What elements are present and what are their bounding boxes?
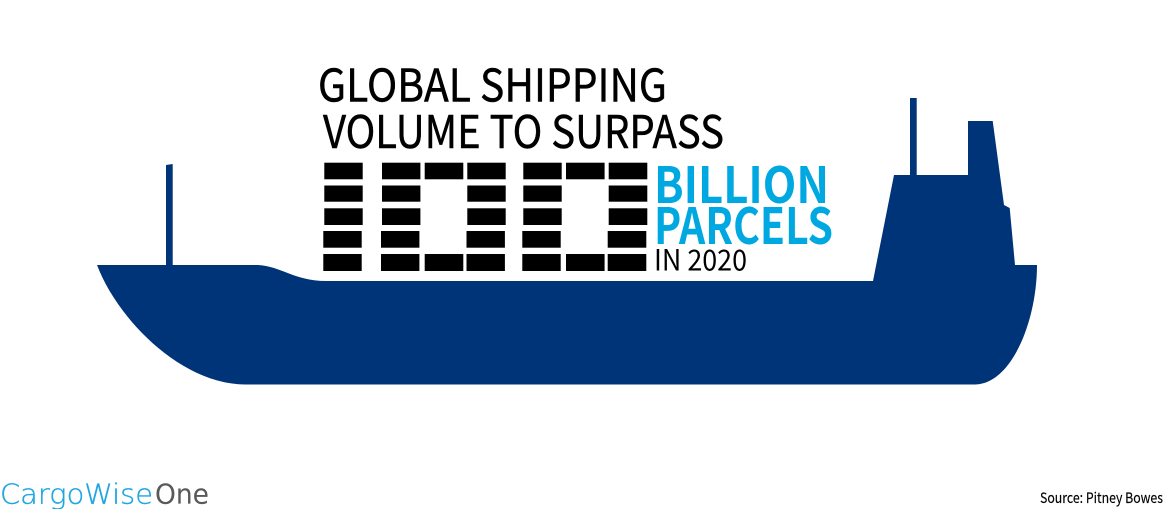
billion parcels label: PARCELS — [654, 187, 833, 259]
title: VOLUME TO SURPASS — [323, 96, 724, 161]
title: GLOBAL SHIPPING — [318, 50, 667, 114]
title — [318, 50, 724, 161]
billion parcels label: BILLION — [654, 146, 829, 218]
billion parcels label — [654, 146, 833, 259]
100 built from containers — [323, 163, 647, 271]
in 2020 label: IN 2020 — [654, 238, 747, 280]
ship silhouette — [97, 98, 1037, 384]
